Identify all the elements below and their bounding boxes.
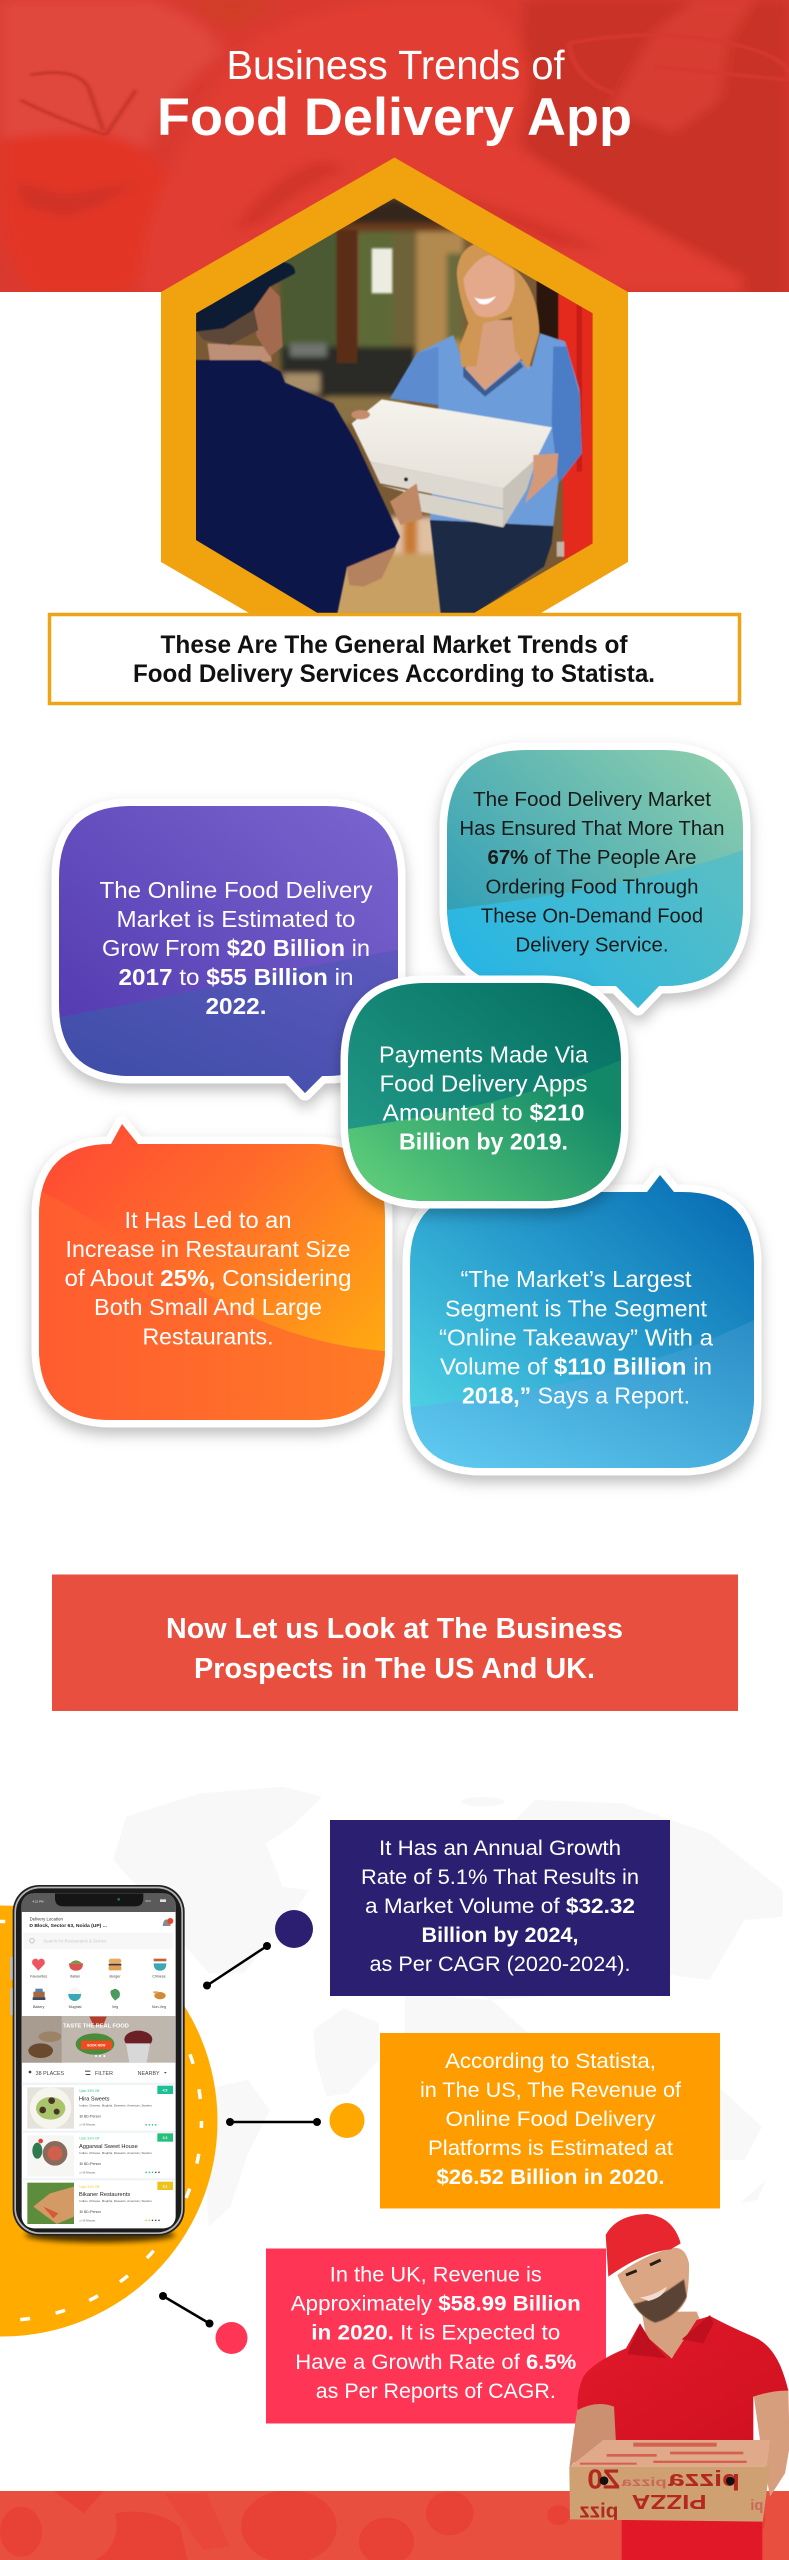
speech bubble: online food delivery market growth: 2022. <box>206 993 266 1019</box>
box holes <box>600 2476 735 2485</box>
pizza box printing: PIZZA <box>632 2490 707 2513</box>
delivery location: Delivery Location <box>30 1916 63 1921</box>
footer band with food pattern <box>0 2490 789 2560</box>
list item: Bikaner Restaurants: Indian, Chinese, Mughlai, Desserts, American, Starters <box>79 2199 152 2203</box>
list item: Aggarwal Sweet House: Indian, Chinese, Mughlai, Desserts, American, Starters <box>79 2151 152 2155</box>
list item: Aggarwal Sweet House: 3.3 <box>163 2136 167 2140</box>
delivery location: D Block, Sector 63, Noida (UP) ... <box>29 1923 108 1929</box>
speech bubble: 67% of people ordering: 67% of The People Are <box>488 846 696 869</box>
face <box>617 2248 689 2323</box>
speech bubble: online food delivery market growth: The Online Food Delivery <box>100 877 373 903</box>
speech bubble: restaurant size increase <box>39 1124 385 1420</box>
header band: red food photo <box>0 0 789 300</box>
list item: Aggarwal Sweet House: 30 BD /Person <box>79 2162 101 2166</box>
amber circle with dashed road <box>0 1906 218 2336</box>
right arm and hand <box>753 2389 789 2497</box>
status bar <box>22 1893 176 1912</box>
collar <box>627 2315 713 2358</box>
list item: Aggarwal Sweet House: ●●●●● <box>145 2171 161 2175</box>
category icons: Italian <box>70 1975 80 1979</box>
speech bubble: 67% of people ordering: Ordering Food Through <box>486 876 698 898</box>
info box: US revenue: in The US, The Revenue of <box>420 2079 681 2102</box>
list item: Bikaner Restaurants: 3.1 <box>163 2184 167 2188</box>
pizza box printing: pizza <box>667 2466 740 2491</box>
speech bubble: restaurant size increase: Both Small And Large <box>94 1294 322 1320</box>
cap <box>606 2214 681 2277</box>
search <box>29 1938 106 1944</box>
speech bubble: payments via delivery apps: Billion by 2019. <box>399 1128 568 1154</box>
filter row: NEARBY <box>138 2071 160 2077</box>
speech bubble: payments via delivery apps <box>348 983 621 1201</box>
speech bubble: restaurant size increase: Increase in Restaurant Size <box>66 1236 350 1262</box>
speech bubble: payments via delivery apps: Food Delivery Apps <box>380 1070 588 1096</box>
shirt lower <box>622 2520 762 2560</box>
speech bubble: largest segment online takeaway: “Online Takeaway” With a <box>439 1324 713 1350</box>
speech bubble: largest segment online takeaway: Segment is The Segment <box>445 1296 708 1322</box>
filter row: FILTER <box>95 2071 113 2077</box>
info box: UK revenue <box>266 2248 606 2424</box>
world map background <box>113 1787 783 2227</box>
list item: Hira Sweets: Upto 33% Off <box>79 2089 99 2093</box>
neck <box>642 2312 703 2358</box>
category icons: Bakery <box>33 2005 45 2009</box>
speech bubble: largest segment online takeaway <box>410 1175 754 1468</box>
list item: Bikaner Restaurants: 30 BD /Person <box>79 2210 101 2214</box>
intro text box: Food Delivery Services According to Statista. <box>133 660 655 688</box>
speech bubble: online food delivery market growth: 2017 to $55 Billion in <box>118 964 353 990</box>
info box: US revenue <box>380 2033 720 2208</box>
pizza box top <box>570 2440 770 2467</box>
speech bubble: restaurant size increase: It Has Led to an <box>124 1207 292 1233</box>
list item: Hira Sweets: Hira Sweets <box>79 2096 110 2102</box>
section banner: Now Let us Look at The Business <box>166 1613 623 1645</box>
beard <box>633 2279 687 2323</box>
category icons: Non-Veg <box>152 2005 166 2009</box>
list item: Bikaner Restaurants: Bikaner Restaurents <box>79 2192 130 2198</box>
list item: Hira Sweets: Indian, Chinese, Mughlai, Desserts, American, Starters <box>79 2103 152 2107</box>
category icons: Veg <box>112 2005 118 2009</box>
info box: UK revenue: as Per Reports of CAGR. <box>316 2380 556 2403</box>
list item: Hira Sweets: ◷ 45 Minutes <box>79 2123 96 2127</box>
info box: US revenue: According to Statista, <box>445 2050 656 2073</box>
filter row: 38 PLACES <box>36 2071 65 2077</box>
info box: annual growth: Rate of 5.1% That Results in <box>361 1866 639 1889</box>
pizza box printing: pizza <box>621 2475 667 2489</box>
info box: annual growth: as Per CAGR (2020-2024). <box>370 1953 630 1976</box>
category icons <box>30 1959 166 2009</box>
speech bubble: online food delivery market growth: Market is Estimated to <box>116 906 356 932</box>
delivery location <box>30 1917 174 1928</box>
category icons: Favourites <box>30 1975 47 1979</box>
category icons: Mughlai <box>69 2005 82 2009</box>
pizza boxes <box>351 399 558 527</box>
delivery man holding a pizza box <box>569 2214 789 2560</box>
speech bubble: 67% of people ordering: The Food Delivery Market <box>473 788 711 811</box>
pizza box top print <box>580 2443 747 2465</box>
speech bubble: largest segment online takeaway: Volume of $110 Billion in <box>440 1354 712 1380</box>
polo shirt <box>577 2316 788 2443</box>
marker dot amber <box>330 2103 364 2138</box>
filter row <box>22 2071 176 2085</box>
search: Search for Restaurants & Dishes <box>43 1939 106 1944</box>
list item: Bikaner Restaurants: ◷ 45 Minutes <box>79 2218 96 2222</box>
photo: delivery man handing pizza box to a customer <box>190 190 600 617</box>
door <box>537 280 600 560</box>
title line 2: Food Delivery App <box>157 88 632 147</box>
info box: UK revenue: In the UK, Revenue is <box>330 2264 542 2286</box>
list item: Aggarwal Sweet House <box>27 2133 173 2177</box>
title <box>157 42 632 147</box>
hexagon photo frame <box>161 158 628 613</box>
list item: Hira Sweets: ●●●●· <box>145 2123 160 2127</box>
speech bubble: restaurant size increase: of About 25%, Considering <box>64 1265 352 1291</box>
promo banner: BOOK NOW <box>87 2043 105 2047</box>
connector 2 <box>226 2118 321 2126</box>
list item: Aggarwal Sweet House: Upto 33% Off <box>79 2137 99 2141</box>
speech bubble: payments via delivery apps: Payments Made Via <box>379 1042 588 1068</box>
info box: US revenue: Online Food Delivery <box>446 2108 656 2131</box>
status bar: 4:21 PM <box>32 1899 44 1903</box>
left arm <box>569 2403 617 2468</box>
connector 3 <box>159 2292 214 2328</box>
promo banner: TASTE THE REAL FOOD <box>63 2024 129 2030</box>
info box: UK revenue: Approximately $58.99 Billion <box>291 2292 581 2316</box>
info box: UK revenue: in 2020. It is Expected to <box>311 2322 560 2344</box>
speech bubble: payments via delivery apps: Amounted to $210 <box>382 1100 584 1126</box>
category icons: Chinese <box>152 1975 166 1979</box>
info box: US revenue: $26.52 Billion in 2020. <box>436 2166 664 2189</box>
pizza box printing <box>580 2469 762 2520</box>
info box: annual growth <box>330 1820 670 1996</box>
intro text box <box>50 614 740 704</box>
section banner: Prospects in The US And UK. <box>194 1653 595 1685</box>
speech bubble: largest segment online takeaway: “The Market’s Largest <box>460 1266 692 1292</box>
list item: Aggarwal Sweet House: ◷ 45 Minutes <box>79 2170 96 2174</box>
pizza box printing: Z0 <box>587 2463 620 2494</box>
list item: Bikaner Restaurants: ●●●●● <box>145 2219 161 2223</box>
category icons: Burger <box>110 1975 121 1979</box>
pizza box printing: pi <box>750 2498 763 2514</box>
list item: Hira Sweets: 4.5 <box>163 2088 167 2092</box>
speech bubble: 67% of people ordering: Delivery Service. <box>516 934 668 956</box>
speech bubble: 67% of people ordering: These On-Demand Food <box>481 904 703 928</box>
info box: annual growth: Billion by 2024, <box>422 1924 578 1947</box>
list item: Hira Sweets <box>27 2086 173 2129</box>
info box: US revenue: Platforms is Estimated at <box>428 2137 673 2160</box>
speech bubble: 67% of people ordering: Has Ensured That More Than <box>460 817 724 840</box>
title line 1: Business Trends of <box>226 42 565 88</box>
status bar: 32% <box>145 1899 151 1903</box>
speech bubble: online food delivery market growth: Grow From $20 Billion in <box>102 935 370 961</box>
connector 1 <box>203 1942 271 1990</box>
list item: Bikaner Restaurants <box>27 2182 173 2224</box>
woman <box>390 243 582 613</box>
speech bubble: online food delivery market growth <box>59 806 398 1093</box>
pizza box printing: pizz <box>579 2499 618 2522</box>
speech bubble: 67% of people ordering <box>447 750 743 1008</box>
eyes <box>626 2260 661 2275</box>
speech bubble: restaurant size increase: Restaurants. <box>142 1324 274 1350</box>
smile <box>640 2287 667 2301</box>
phone app mockup <box>10 1885 185 2242</box>
delivery man <box>190 262 423 617</box>
speech bubble: largest segment online takeaway: 2018,” Says a Report. <box>462 1382 690 1408</box>
intro text box: These Are The General Market Trends of <box>160 631 628 659</box>
list item: Aggarwal Sweet House: Aggarwal Sweet House <box>79 2144 138 2150</box>
pizza box front <box>569 2467 770 2522</box>
info box: annual growth: a Market Volume of $32.32 <box>365 1895 635 1918</box>
info box: UK revenue: Have a Growth Rate of 6.5% <box>295 2351 577 2374</box>
info box: annual growth: It Has an Annual Growth <box>379 1837 621 1860</box>
promo banner <box>22 2016 176 2063</box>
marker dot navy <box>275 1910 313 1948</box>
marker dot pink <box>216 2322 248 2354</box>
section banner <box>52 1574 738 1711</box>
list item: Hira Sweets: 30 BD /Person <box>79 2114 101 2118</box>
list item: Bikaner Restaurants: Upto 31% Off <box>79 2185 99 2189</box>
